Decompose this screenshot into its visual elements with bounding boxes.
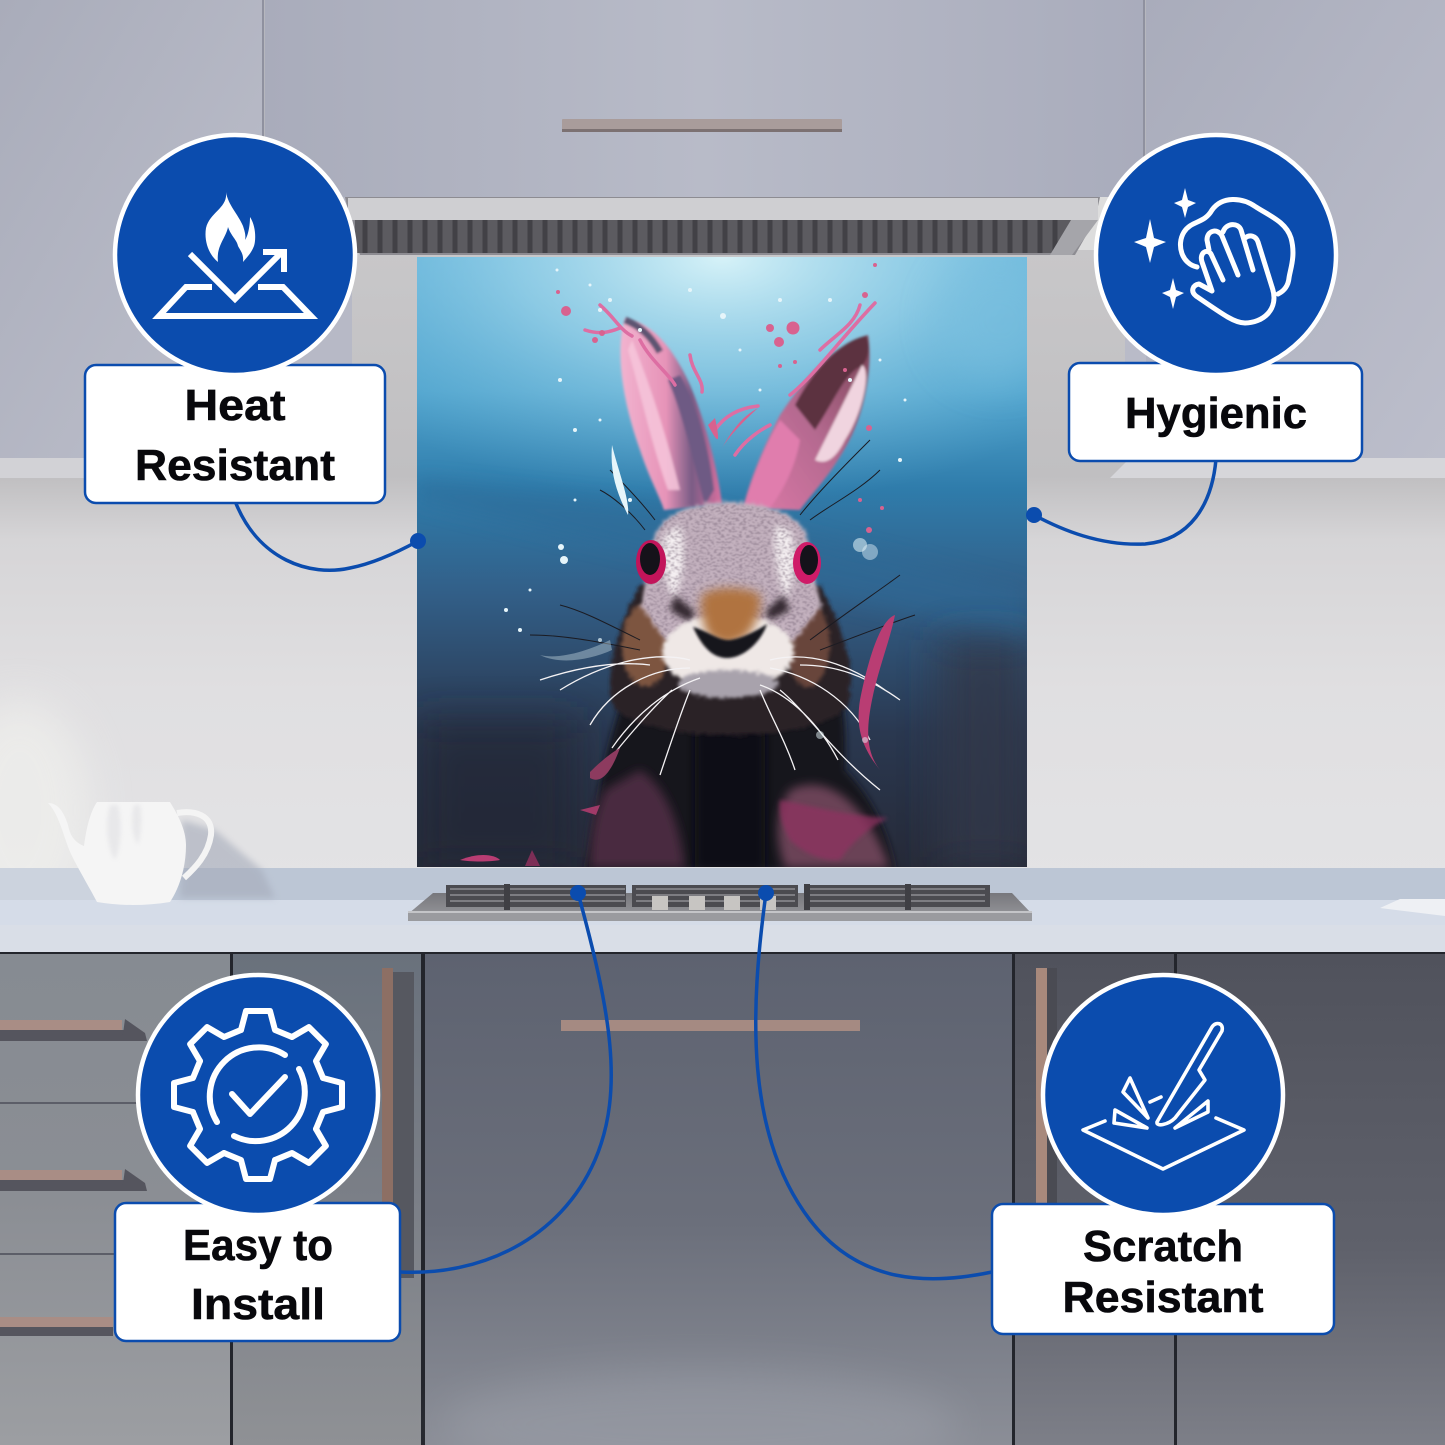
- callout: easy to install: [115, 885, 611, 1341]
- gas hob: [408, 884, 1032, 921]
- connector: [400, 885, 611, 1272]
- icon circle: [138, 975, 378, 1215]
- fur texture: [644, 504, 818, 640]
- label: [992, 1204, 1334, 1334]
- label: Hygienic: [1125, 389, 1307, 438]
- nose: [693, 624, 767, 658]
- icon circle: [115, 135, 355, 375]
- label: [1069, 363, 1362, 461]
- panel background: [417, 257, 1060, 870]
- callout: heat resistant: [85, 135, 426, 570]
- wall light glow: [0, 700, 90, 920]
- callout: hygienic: [1026, 135, 1362, 544]
- rabbit body: [585, 700, 895, 870]
- label: Heat: [184, 381, 286, 430]
- right ear: [743, 335, 869, 510]
- icon: flame over surface: [159, 192, 311, 316]
- icon: hand wiping with sparkles: [1134, 188, 1293, 323]
- icon: gear with check: [174, 1011, 342, 1179]
- icon circle: [1096, 135, 1336, 375]
- label: Install: [191, 1280, 325, 1329]
- whiskers: [540, 657, 900, 790]
- teapot: [48, 802, 275, 905]
- icon circle: [1043, 975, 1283, 1215]
- label: Scratch: [1083, 1222, 1243, 1271]
- left ear: [620, 318, 722, 510]
- connector: [756, 885, 992, 1279]
- handles: [0, 968, 1057, 1336]
- connector: [1026, 459, 1216, 544]
- label: [85, 365, 385, 503]
- worktop: [0, 868, 1445, 952]
- head: [530, 440, 915, 790]
- paint splashes: [460, 263, 895, 866]
- lower cabinets: [0, 952, 1445, 1445]
- upper cabinets: [0, 0, 1445, 478]
- label: Easy to: [183, 1221, 333, 1270]
- eyes: [636, 540, 821, 584]
- white spray: [504, 268, 906, 743]
- icon: knife scratching surface: [1083, 1024, 1244, 1169]
- label: [115, 1203, 400, 1341]
- paint streaks on ears: [585, 303, 875, 455]
- connector: [235, 501, 426, 570]
- label: Resistant: [135, 441, 335, 490]
- cooker hood: [345, 197, 1100, 255]
- wall: [0, 250, 1445, 880]
- label: Resistant: [1062, 1273, 1264, 1322]
- callout: scratch resistant: [756, 885, 1334, 1334]
- worktop highlights: [0, 868, 1445, 916]
- glass panel: rabbit artwork: [417, 257, 1060, 870]
